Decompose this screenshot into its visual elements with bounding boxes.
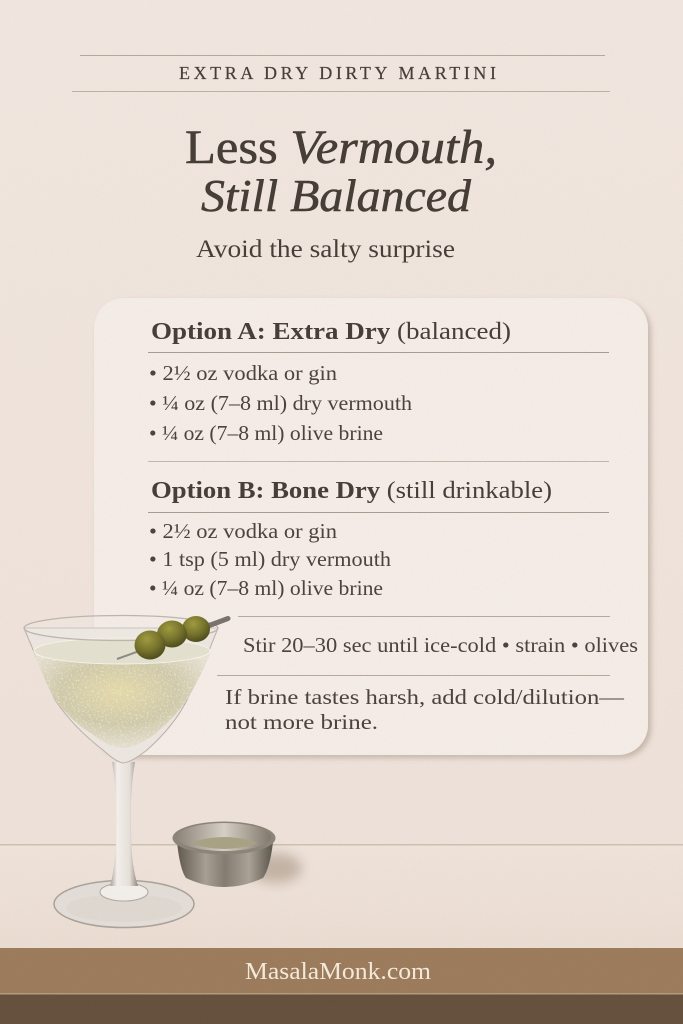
subtitle: Avoid the salty surprise — [196, 236, 455, 263]
option A ingredients: • ¼ oz (7–8 ml) olive brine — [149, 421, 383, 445]
kicker: EXTRA DRY DIRTY MARTINI — [179, 63, 496, 83]
glass stem — [110, 762, 138, 886]
title: Still Balanced — [201, 171, 472, 221]
option A ingredients — [149, 361, 413, 445]
cocktail pick — [117, 618, 228, 659]
olives — [134, 616, 210, 660]
website label: MasalaMonk.com — [245, 959, 431, 985]
option A ingredients: • 2½ oz vodka or gin — [149, 361, 338, 385]
option B heading: Option B: Bone Dry (still drinkable) — [151, 478, 552, 504]
panel: recipe card — [94, 298, 648, 755]
option B ingredients — [149, 519, 392, 600]
icon: ramekin of brine — [172, 822, 302, 887]
glass bowl — [24, 628, 218, 763]
option A heading: Option A: Extra Dry (balanced) — [151, 319, 511, 345]
option B ingredients: • 1 tsp (5 ml) dry vermouth — [149, 547, 392, 571]
tip: not more brine. — [225, 710, 378, 734]
martini liquid — [34, 652, 211, 748]
option A ingredients: • ¼ oz (7–8 ml) dry vermouth — [149, 391, 413, 415]
table surface — [0, 844, 683, 948]
method line: Stir 20–30 sec until ice-cold • strain • olives — [243, 633, 638, 657]
title — [185, 121, 497, 221]
glass foot — [54, 880, 194, 928]
option B ingredients: • ¼ oz (7–8 ml) olive brine — [149, 576, 383, 600]
footer band — [0, 948, 683, 1024]
glass rim — [24, 616, 218, 640]
icon: martini glass with olives — [24, 616, 228, 928]
title: Less Vermouth, — [185, 121, 497, 174]
tip — [225, 685, 625, 734]
tip: If brine tastes harsh, add cold/dilution— — [225, 685, 625, 709]
option B ingredients: • 2½ oz vodka or gin — [149, 519, 338, 543]
